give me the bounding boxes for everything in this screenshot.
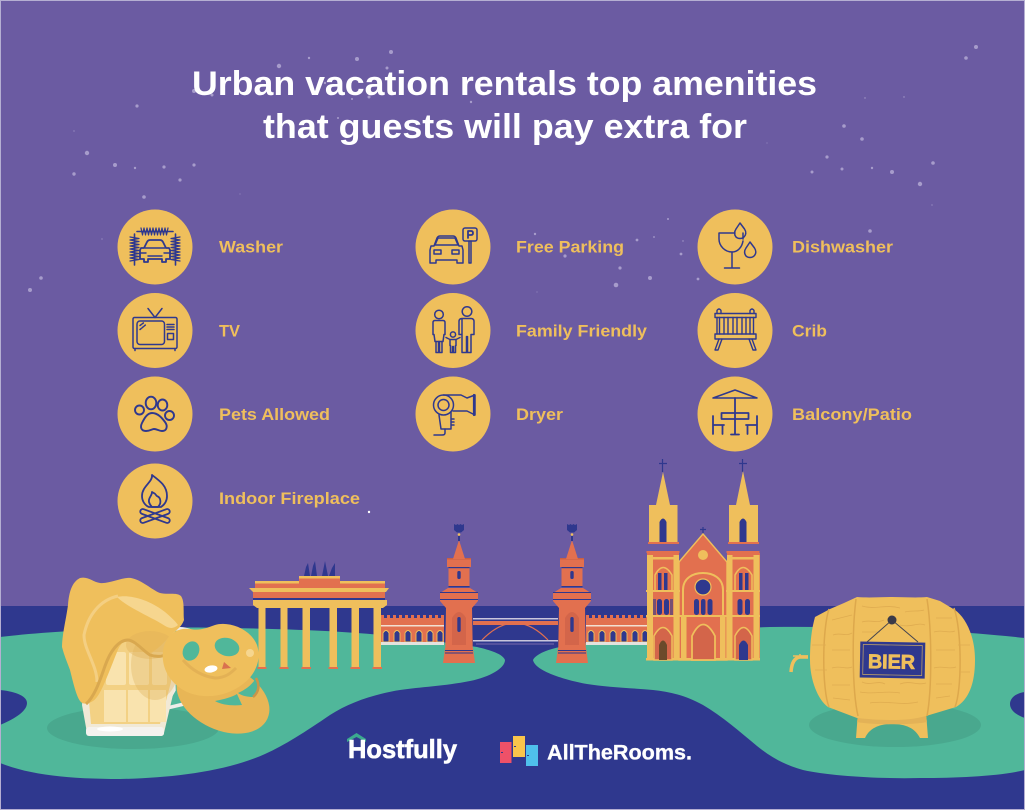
entablature: [249, 588, 389, 592]
barrel body: [810, 597, 975, 720]
beer barrel: [791, 597, 981, 747]
title: that guests will pay extra for: [263, 108, 747, 146]
pretzel: [163, 624, 281, 748]
sign string: [867, 620, 918, 642]
back pretzel: [165, 648, 281, 748]
label: Balcony/Patio: Balcony/Patio: [792, 406, 912, 424]
Brandenburg Gate: [249, 561, 389, 669]
shadow: [47, 707, 219, 749]
roof icon: [347, 733, 366, 742]
icon: car wash: [118, 210, 192, 284]
amenity: Balcony/Patio: [698, 376, 912, 452]
stars: [28, 45, 978, 513]
icon: parked car with sign: [416, 210, 490, 284]
right tower: [553, 524, 591, 663]
label: TV: TV: [219, 322, 240, 340]
left tower: [440, 524, 478, 663]
central span: [473, 618, 558, 620]
amenity: Dishwasher: [698, 210, 894, 284]
Oberbaum Bridge: [381, 524, 649, 663]
icon: wine glass and drops: [698, 210, 772, 284]
spires: [656, 471, 750, 505]
label: Washer: Washer: [219, 238, 284, 256]
label: Free Parking: Free Parking: [516, 238, 624, 256]
amenity: TV: [118, 293, 240, 368]
mug handle: [163, 629, 200, 709]
icon: campfire: [118, 464, 192, 538]
label: Crib: Crib: [792, 322, 827, 340]
attic: [299, 576, 340, 588]
legs: [856, 712, 928, 738]
amenity: Indoor Fireplace: [118, 464, 360, 538]
windows: [653, 573, 750, 615]
title: Urban vacation rentals top amenities: [192, 65, 817, 103]
sign text: BIER: [868, 651, 916, 674]
land: right bank: [533, 627, 1025, 778]
glass: [82, 630, 175, 736]
icon: paw: [118, 376, 192, 452]
logo: Hostfully: [347, 733, 458, 764]
columns: [258, 607, 381, 669]
wordmark: AllTheRooms.: [547, 742, 692, 764]
crosses: [659, 459, 747, 534]
foam highlights: [117, 596, 178, 628]
beer mug with foam: [47, 578, 219, 749]
side towers: [647, 553, 679, 660]
icon: television: [118, 293, 192, 368]
quadriga: [304, 561, 335, 576]
label: Dryer: Dryer: [516, 406, 564, 424]
sign: [860, 641, 925, 679]
foam: [62, 578, 184, 704]
icon: patio table and umbrella: [698, 376, 772, 452]
icon: hair dryer: [416, 376, 490, 452]
amenity: Dryer: [416, 376, 564, 452]
rose window: [683, 573, 723, 615]
water band: [0, 606, 1025, 810]
amenity: Crib: [698, 293, 827, 368]
label: Family Friendly: Family Friendly: [516, 322, 648, 340]
amenity: Family Friendly: [416, 293, 648, 368]
label: Pets Allowed: Pets Allowed: [219, 406, 330, 424]
doors: [692, 624, 715, 660]
wood grain: [812, 606, 970, 703]
wordmark: Hostfully: [348, 734, 458, 764]
title: [192, 65, 817, 146]
amenity: Free Parking: [416, 210, 624, 284]
door icons: [500, 742, 512, 763]
window arches: [655, 568, 752, 590]
barrel bands: [824, 599, 960, 716]
label: Indoor Fireplace: Indoor Fireplace: [219, 490, 360, 508]
bridge walls: [381, 615, 444, 645]
pretzel holes: [215, 694, 242, 705]
front pretzel: [163, 624, 259, 696]
label: Dishwasher: Dishwasher: [792, 238, 894, 256]
icon: crib: [698, 293, 772, 368]
shadow: [809, 703, 981, 747]
amenity: Washer: [118, 210, 284, 284]
icon: family: [416, 293, 490, 368]
amenity: Pets Allowed: [118, 376, 330, 452]
land: left bank: [0, 627, 505, 779]
cathedral: [646, 459, 760, 660]
logo: AllTheRooms: [500, 736, 692, 766]
tap: [791, 657, 808, 672]
gable and nave: [679, 534, 727, 660]
belfries: [649, 505, 678, 542]
